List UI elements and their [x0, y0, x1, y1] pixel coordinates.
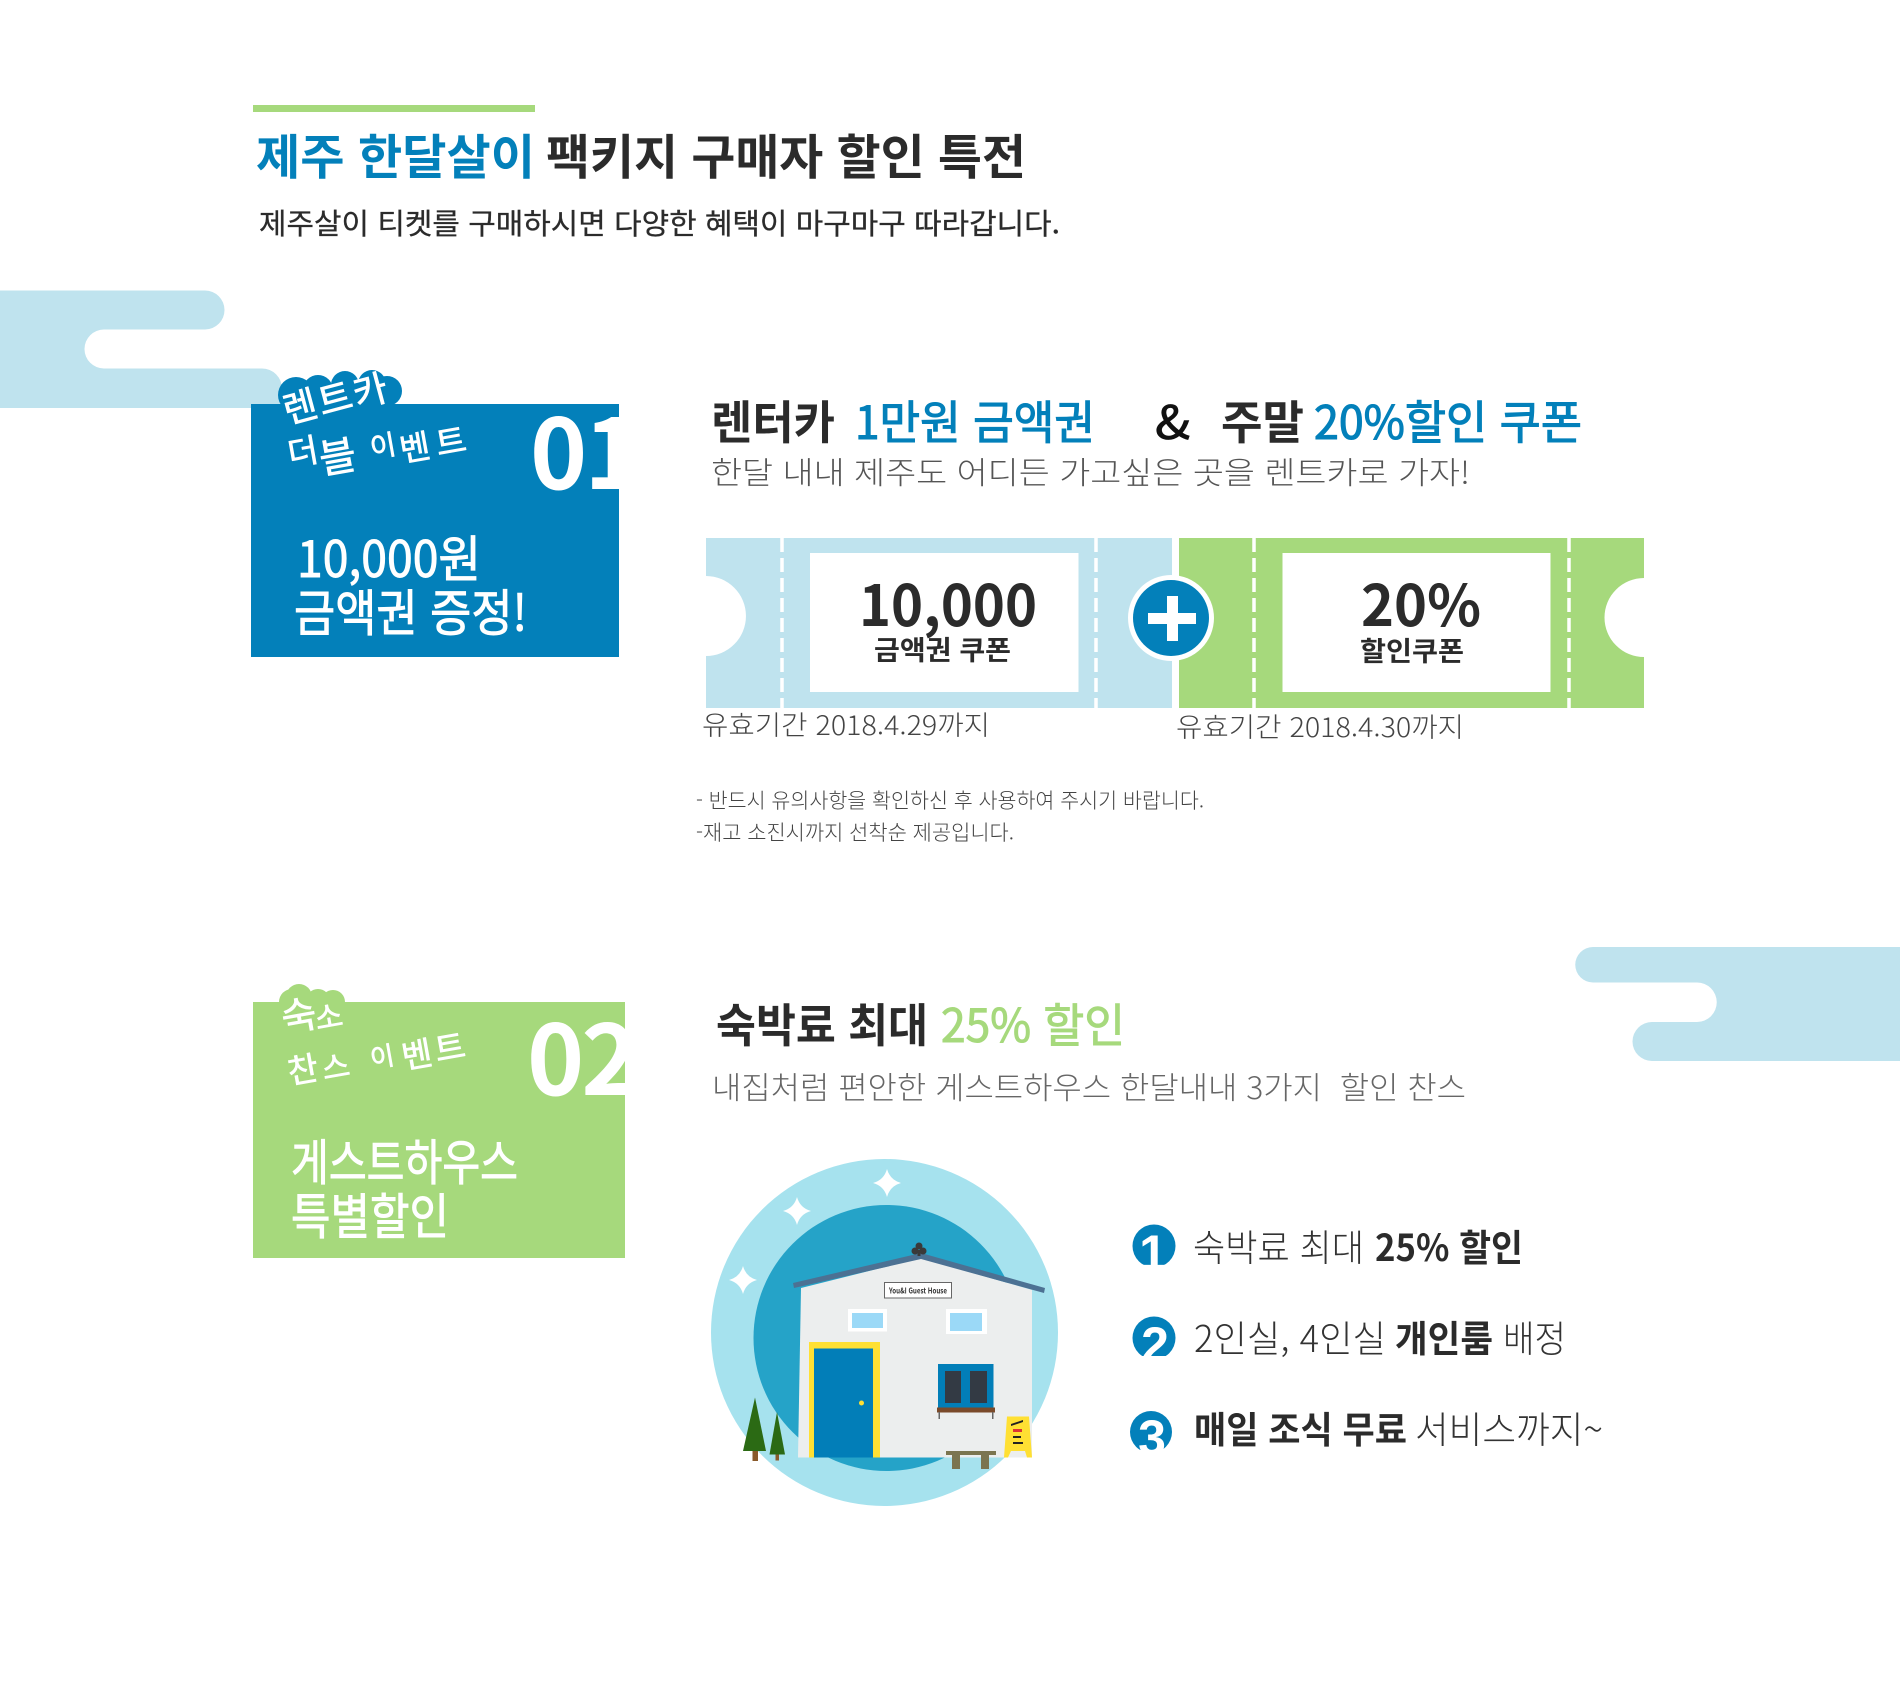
panel text: voucher: 금액권 증정! [294, 574, 527, 646]
tag text: lodging: 소 [311, 991, 346, 1039]
panel: event 02 [253, 982, 635, 1258]
tag background: blue cloud [278, 370, 402, 413]
list item 1 [1132, 1224, 1520, 1265]
tag text: double event: 벤 [395, 419, 434, 472]
sandwich board [1004, 1416, 1032, 1458]
ticket label: 할인쿠폰 [1360, 630, 1464, 669]
list item 3: 서비스까지~ [1415, 1400, 1603, 1454]
cloud: right [1575, 947, 1900, 1061]
list item 2 [1132, 1316, 1562, 1358]
heading: rental car offer: 1만원 금액권 [855, 387, 1095, 453]
list item 1: 25% 할인 [1375, 1218, 1523, 1272]
tag text: rental car: 렌 [276, 374, 323, 435]
tag text: rental car: 트 [311, 366, 358, 427]
list item 2: 2인실, 4인실 [1194, 1309, 1386, 1363]
tag text: chance event: 벤 [397, 1026, 436, 1079]
panel background [253, 1002, 625, 1258]
heading: rental car offer: 주말 [1221, 387, 1304, 453]
tag text: chance event: 스 [318, 1041, 353, 1089]
panel background [251, 404, 619, 657]
heading subtext: 내집처럼 편안한 게스트하우스 한달내내 3가지 할인 찬스 [712, 1063, 1466, 1108]
panel text: amount: 10,000원 [297, 520, 481, 592]
lower window [938, 1364, 994, 1408]
heading: rental car offer [711, 387, 1582, 453]
tag background: green cloud [279, 984, 345, 1015]
accent bar [253, 105, 535, 112]
ticket: 20% coupon [1179, 538, 1644, 708]
validity: coupon: 유효기간 2018.4.30까지 [1176, 706, 1464, 745]
tag text: chance event: 트 [430, 1019, 469, 1072]
heading: rental car offer: 20%할인 쿠폰 [1314, 387, 1582, 453]
notes: - 반드시 유의사항을 확인하신 후 사용하여 주시기 바랍니다. [696, 785, 1204, 815]
cloud: left [0, 290, 282, 408]
icon: number 2 [1132, 1316, 1176, 1356]
tag text: double event: 트 [431, 413, 470, 466]
title [256, 118, 1026, 188]
heading: lodging offer: 숙박료 최대 [716, 990, 928, 1056]
title: 제주 한달살이 [256, 118, 535, 188]
heading: lodging offer: 25% 할인 [941, 990, 1125, 1056]
heading: lodging offer [716, 990, 1125, 1056]
heading: rental car offer: & [1155, 387, 1190, 453]
tag text: double event: 블 [314, 422, 360, 486]
validity: voucher: 유효기간 2018.4.29까지 [702, 704, 990, 743]
heading subtext: 한달 내내 제주도 어디든 가고싶은 곳을 렌트카로 가자! [711, 448, 1470, 493]
notes [696, 785, 1204, 847]
ticket value: 10,000 [859, 561, 1037, 643]
title: 팩키지 구매자 할인 특전 [546, 118, 1026, 188]
notes: -재고 소진시까지 선착순 제공입니다. [696, 817, 1014, 847]
panel text: guesthouse: 게스트하우스 [291, 1124, 518, 1195]
tag text: lodging: 숙 [276, 983, 320, 1043]
icon: sparkles [729, 1169, 901, 1294]
list item 3: 매일 조식 무료 [1194, 1400, 1407, 1454]
heading: rental car offer: 렌터카 [711, 387, 835, 453]
upper windows [848, 1309, 887, 1332]
list item 3 [1130, 1411, 1602, 1450]
roof [793, 1253, 1045, 1293]
list item 2: 배정 [1503, 1309, 1566, 1363]
ticket label: 금액권 쿠폰 [874, 629, 1011, 668]
panel: event 01 [251, 358, 638, 657]
icon: number 1 [1132, 1224, 1176, 1265]
tag text: chance event: 이 [367, 1035, 397, 1076]
panel text: special discount: 특별할인 [291, 1178, 449, 1249]
icon: number 3 [1130, 1411, 1172, 1450]
subtitle: 제주살이 티켓를 구매하시면 다양한 혜택이 마구마구 따라갑니다. [259, 201, 1060, 243]
wall [798, 1258, 1032, 1458]
list item 2: 개인룸 [1395, 1309, 1493, 1363]
number 01: 01 [530, 376, 638, 517]
list item 1: 숙박료 최대 [1193, 1218, 1364, 1272]
nameplate: You&I Guest House [888, 1286, 947, 1296]
tag text: double event: 이 [367, 423, 399, 467]
illustration: guesthouse [711, 1159, 1058, 1506]
ticket: 10,000 voucher [706, 538, 1172, 708]
icon: number 1: 1 [1139, 1225, 1167, 1281]
door [809, 1342, 880, 1458]
icon: number 3: 3 [1138, 1410, 1166, 1466]
tag text: chance event: 찬 [283, 1041, 322, 1094]
number 02: 02 [527, 982, 635, 1123]
tag text: double event: 더 [283, 423, 322, 476]
icon: plus [1128, 575, 1214, 661]
ticket value: 20% [1361, 561, 1481, 643]
trees [743, 1398, 785, 1461]
nameplate [884, 1282, 952, 1298]
bench [946, 1451, 996, 1455]
icon: number 2: 2 [1141, 1317, 1169, 1373]
tag text: rental car: 카 [346, 358, 393, 419]
